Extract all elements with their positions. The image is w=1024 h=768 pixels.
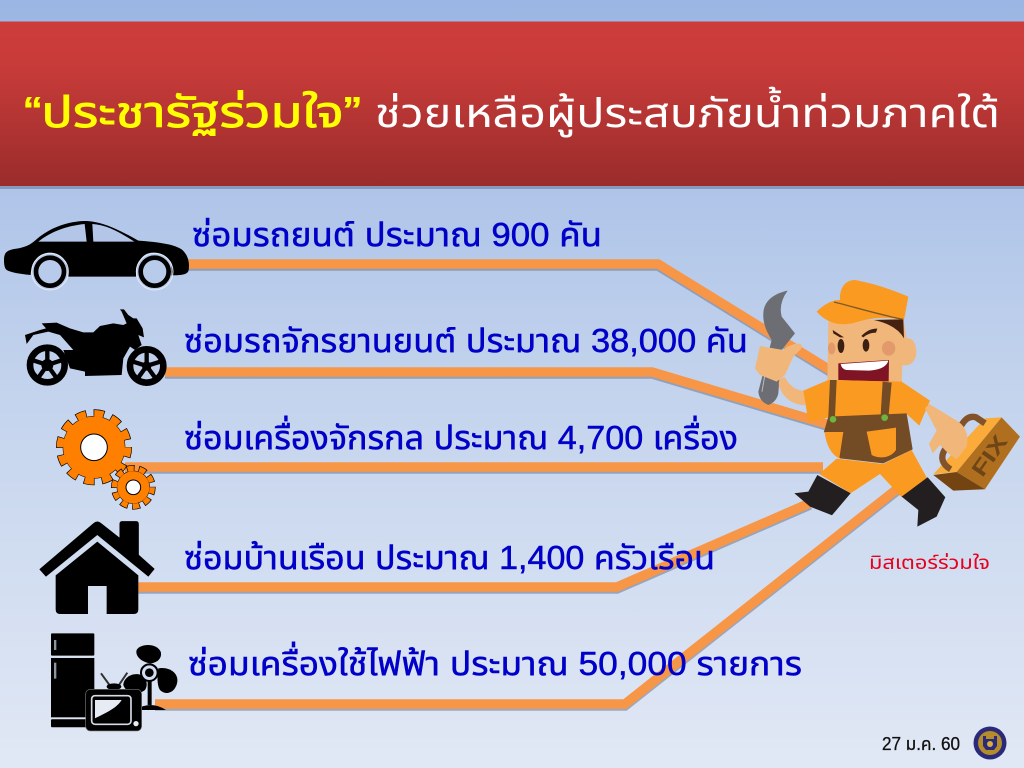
small gear [114, 468, 152, 506]
icon: house [40, 522, 154, 614]
title: highlighted phrase: “ประชารัฐร่วมใจ” [24, 89, 361, 137]
toolbox [933, 417, 1020, 491]
title banner [0, 22, 1024, 189]
boots [794, 475, 945, 527]
label: machinery repairs: ซ่อมเครื่องจักรกล ประมาณ 4,700 เครื่อง [184, 415, 738, 456]
icon: appliances [51, 633, 177, 731]
label: car repairs: ซ่อมรถยนต์ ประมาณ 900 คัน [192, 216, 602, 253]
trousers [819, 450, 927, 497]
title: remaining phrase: ช่วยเหลือผู้ประสบภัยน้ำท่วมภาคใต้ [375, 86, 1000, 137]
icon: gears [60, 413, 152, 506]
right arm and hand [925, 404, 967, 459]
connector lines [125, 264, 897, 706]
head [827, 318, 916, 385]
overalls [824, 380, 913, 463]
icon: motorcycle [25, 309, 163, 383]
cap [817, 280, 908, 324]
icon: government seal [974, 726, 1006, 760]
large gear [60, 413, 128, 481]
shirt [803, 380, 930, 426]
date: 27 ม.ค. 60 [882, 734, 960, 754]
mascot caption: มิสเตอร์ร่วมใจ [869, 551, 990, 574]
mascot: repairman [755, 280, 1020, 527]
toolbox label: FIX [967, 430, 1013, 481]
fan [123, 645, 177, 710]
label: electrical appliance repairs: ซ่อมเครื่องใช้ไฟฟ้า ประมาณ 50,000 รายการ [188, 641, 802, 682]
raised arm and hand [755, 344, 805, 405]
label: house repairs: ซ่อมบ้านเรือน ประมาณ 1,400 ครัวเรือน [184, 539, 715, 576]
fridge [51, 633, 94, 727]
icon: car [4, 221, 189, 290]
label: motorcycle repairs: ซ่อมรถจักรยานยนต์ ประมาณ 38,000 คัน [184, 322, 748, 359]
wrench [758, 291, 795, 405]
television [86, 673, 142, 731]
